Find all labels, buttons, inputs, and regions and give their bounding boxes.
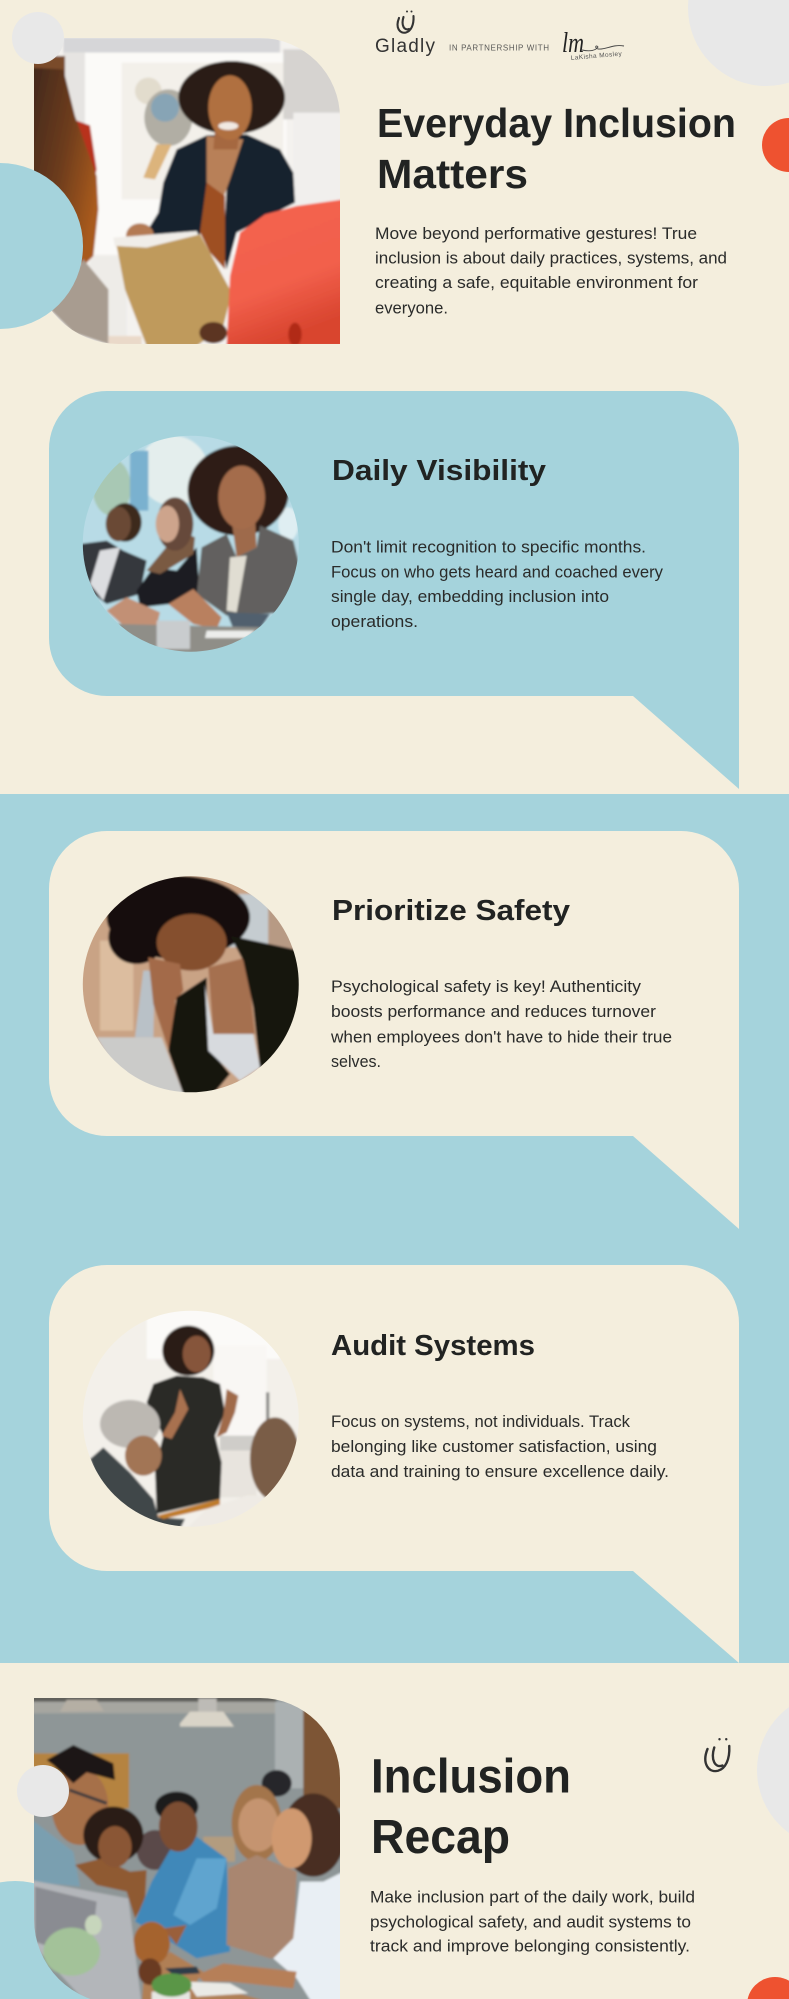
intro text: Move beyond performative gestures! True — [375, 225, 697, 243]
heading: Daily Visibility — [332, 455, 546, 487]
intro text — [375, 225, 727, 318]
intro text: inclusion is about daily practices, systems, and — [375, 250, 727, 268]
blue section background — [0, 794, 789, 1663]
photo: woman presenting at whiteboard — [80, 1309, 300, 1529]
speech bubble — [49, 831, 739, 1229]
title: Recap — [371, 1811, 510, 1864]
body text — [330, 978, 672, 1071]
intro text: everyone. — [375, 300, 448, 318]
signature name: LaKisha Mosley — [571, 51, 623, 62]
body text — [331, 1413, 669, 1481]
heading: Prioritize Safety — [332, 895, 570, 927]
decorative circle: blue left — [0, 163, 83, 329]
title: Matters — [377, 151, 528, 197]
recap text: track and improve belonging consistently. — [370, 1938, 690, 1956]
body text: operations. — [331, 613, 418, 631]
panel: header — [0, 0, 789, 348]
photo: smiling team around laptop — [30, 1695, 345, 1999]
body text: when employees don't have to hide their true — [330, 1028, 672, 1046]
title: Everyday Inclusion — [377, 100, 736, 146]
panel: Prioritize Safety — [49, 831, 739, 1229]
decorative circle: grey right — [757, 1692, 789, 1848]
Gladly wordmark: Gladly — [375, 36, 436, 57]
title: Inclusion — [371, 1751, 571, 1804]
body text: data and training to ensure excellence daily. — [331, 1463, 669, 1481]
decorative circle: grey top right — [688, 0, 789, 86]
icon: Gladly mark — [398, 10, 414, 33]
body text — [331, 538, 664, 631]
panel: Daily Visibility — [49, 391, 739, 789]
recap text — [370, 1889, 695, 1956]
recap text: psychological safety, and audit systems to — [370, 1913, 691, 1931]
icon: Gladly mark — [705, 1738, 729, 1771]
logo: Gladly — [375, 10, 436, 57]
decorative circle: grey left — [17, 1765, 69, 1817]
photo: woman at laptop with hand to head — [80, 874, 300, 1094]
panel: Audit Systems — [49, 1265, 739, 1663]
body text: Don't limit recognition to specific months. — [331, 538, 646, 556]
recap text: Make inclusion part of the daily work, build — [370, 1889, 695, 1907]
intro text: creating a safe, equitable environment for — [375, 274, 699, 292]
body text: belonging like customer satisfaction, using — [331, 1438, 657, 1456]
photo: woman speaking at meeting — [80, 434, 300, 654]
body text: Focus on systems, not individuals. Track — [331, 1413, 631, 1431]
signature flourish — [582, 46, 624, 51]
decorative circle: orange right — [762, 118, 789, 172]
heading: Audit Systems — [331, 1330, 535, 1362]
decorative circle: grey top left — [12, 12, 64, 64]
panel: recap — [0, 1692, 789, 1999]
title — [377, 100, 736, 197]
body text: Psychological safety is key! Authenticity — [331, 978, 642, 996]
body text: selves. — [331, 1053, 381, 1071]
body text: boosts performance and reduces turnover — [331, 1003, 657, 1021]
logo: LaKisha Mosley — [562, 27, 624, 62]
body text: Focus on who gets heard and coached every — [331, 563, 664, 581]
speech bubble — [49, 391, 739, 789]
body text: single day, embedding inclusion into — [331, 588, 609, 606]
title — [371, 1751, 571, 1864]
speech bubble — [49, 1265, 739, 1663]
signature initials: lm — [562, 27, 584, 59]
decorative circle: blue bottom left — [0, 1881, 98, 1999]
partnership label: IN PARTNERSHIP WITH — [449, 44, 549, 53]
photo: woman presenting folder — [30, 36, 343, 348]
decorative circle: orange bottom right — [747, 1977, 789, 1999]
